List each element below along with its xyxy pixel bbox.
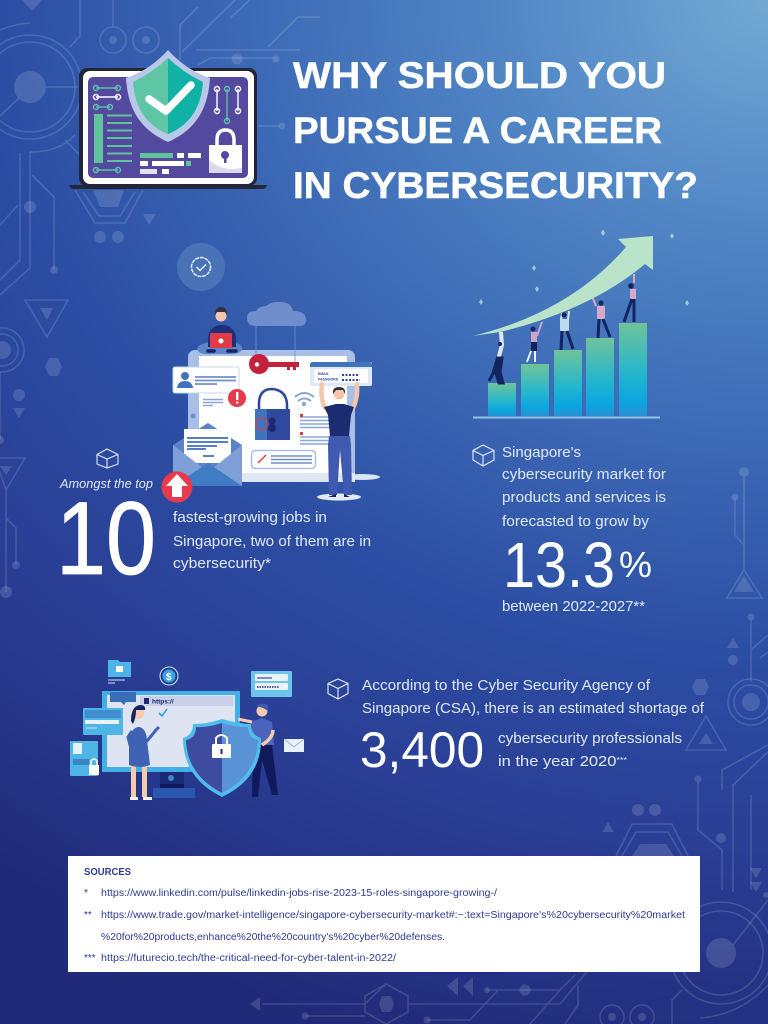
panel: sources: https://www.linkedin.com/pulse/linkedin-jobs-rise-2023-15-roles-singapore-growing-/: [101, 888, 497, 899]
title: IN CYBERSECURITY?: [293, 165, 698, 206]
password card: EMAIL: [318, 372, 330, 376]
stat: 13.3%: 13.3: [503, 529, 615, 601]
sparkles: [479, 229, 689, 306]
icon: laptop with shield: [69, 50, 267, 189]
alert: [228, 389, 246, 407]
panel: sources: [68, 856, 700, 972]
growth arrow: [473, 236, 653, 336]
text block: market growth: between 2022-2027**: [502, 599, 645, 615]
sitting person with laptop: [197, 307, 242, 354]
text block: top 10 jobs: Singapore, two of them are in: [173, 534, 371, 550]
text block: market growth: Singapore's: [502, 445, 581, 461]
text block: talent shortage: in the year 2020: [498, 754, 603, 770]
heading: sources: SOURCES: [84, 866, 131, 878]
text block: market growth: cybersecurity market for: [502, 467, 666, 483]
text block: talent shortage: Singapore (CSA), there is an estimated shortage of: [362, 701, 705, 717]
password card: [310, 362, 372, 386]
text block: top 10 jobs: fastest-growing jobs in: [173, 510, 327, 526]
stat: 13.3%: %: [619, 544, 652, 585]
text block: talent shortage: cybersecurity professionals: [498, 731, 682, 747]
title: [293, 55, 698, 206]
password card: PASSWORD: [318, 378, 339, 382]
panel: sources: %20for%20products,enhance%20the%20country's%20cyber%20defenses.: [101, 932, 445, 943]
panel: sources: https://futurecio.tech/the-critical-need-for-cyber-talent-in-2022/: [101, 953, 396, 964]
shield: [183, 719, 261, 797]
floating cards: [70, 660, 304, 776]
panel: sources: *: [84, 888, 88, 899]
cloud and key: [247, 302, 306, 374]
monitor: [102, 691, 240, 798]
title: PURSUE A CAREER: [293, 110, 662, 151]
panel: sources: ***: [84, 953, 96, 964]
floating cards: $: [166, 672, 172, 683]
bars: [488, 323, 647, 416]
text block: talent shortage: [328, 678, 705, 778]
icon: cube: [328, 679, 348, 699]
text block: market growth: products and services is: [502, 490, 666, 506]
wifi: [295, 393, 314, 405]
padlock: [255, 389, 290, 440]
icon: check badge: [177, 243, 225, 291]
icon: cube: [473, 445, 494, 466]
stat: 10: 10: [56, 481, 156, 597]
text block: talent shortage: ***: [616, 756, 627, 765]
text block: top 10 jobs: [56, 449, 371, 597]
text block: market growth: forecasted to grow by: [502, 514, 650, 530]
illustration: security workspace: [162, 302, 380, 502]
illustration: web security team: [70, 660, 304, 800]
envelope: [173, 423, 242, 486]
panel: sources: **: [84, 910, 92, 921]
text block: top 10 jobs: cybersecurity*: [173, 556, 271, 572]
standing person: [317, 384, 361, 500]
panel: sources: https://www.trade.gov/market-intelligence/singapore-cybersecurity-market#:~:text=Singapore's%20cybersecurity%20market: [101, 910, 685, 921]
profile card: [173, 367, 239, 393]
stat: 3,400: 3,400: [360, 722, 484, 778]
icon: cube: [97, 449, 118, 468]
text block: talent shortage: According to the Cyber Security Agency of: [362, 678, 651, 694]
monitor: https://: [152, 698, 174, 706]
text block: top 10 jobs: Amongst the top: [59, 477, 153, 491]
text block: market growth: [473, 445, 666, 615]
man: [238, 704, 278, 797]
icon: red up arrow: [162, 472, 192, 502]
woman: [128, 705, 159, 800]
title: WHY SHOULD YOU: [293, 55, 666, 96]
illustration: growth chart: [473, 229, 689, 418]
input field: [252, 450, 316, 468]
people pushing: [489, 274, 636, 383]
